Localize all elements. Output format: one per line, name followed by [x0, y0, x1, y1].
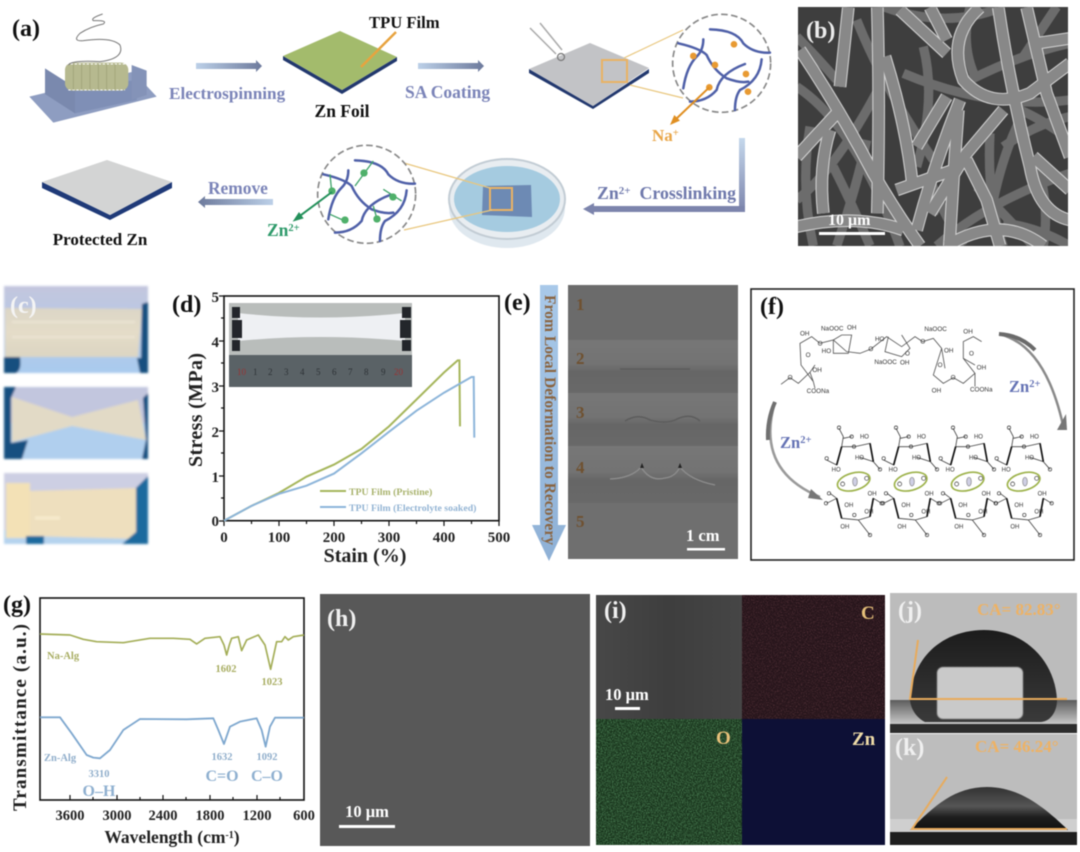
molecule: zinc alginate unit 4: OH [1014, 503, 1023, 509]
bond labels: C=O [205, 768, 239, 785]
inset photo of tensile specimen: 5 [316, 367, 321, 377]
background [890, 734, 1077, 845]
icon: Zn-alginate network circle [293, 145, 416, 243]
panel a: fabrication schematic [12, 13, 771, 249]
molecule: zinc alginate unit 3: OH [958, 503, 967, 509]
element C: C [861, 603, 875, 624]
ticks [219, 296, 499, 526]
molecule: sodium alginate: OH [900, 359, 910, 366]
substrate [890, 700, 1077, 733]
molecule: sodium alginate: O [951, 375, 956, 382]
label h: (h) [327, 606, 356, 632]
text: SA Coating: SA Coating [405, 82, 490, 102]
scale label: 10 μm [605, 685, 649, 704]
legend: TPU Film (Electrolyte soaked) [349, 503, 476, 514]
molecule: zinc alginate unit 1: OH [844, 503, 853, 509]
molecule: sodium alginate: OH [847, 325, 857, 332]
molecule: zinc alginate unit 4: OH [1010, 525, 1019, 531]
legend: TPU Film (Pristine) [349, 487, 432, 498]
scale bar [819, 232, 885, 235]
step numbers: 5 [576, 512, 584, 531]
scale bar [339, 825, 395, 828]
y tick labels: 0 [212, 514, 219, 530]
x axis title: ) [234, 827, 240, 847]
text: Zn2+ left: 2+ [800, 435, 811, 446]
icon: protected Zn plate [42, 160, 172, 220]
fibres [797, 7, 1070, 247]
text: Zn Foil: Zn Foil [315, 101, 370, 121]
molecule: zinc alginate unit 1: HO [855, 455, 864, 461]
map: C [742, 595, 885, 719]
molecule: zinc alginate unit 2: OH [925, 491, 934, 497]
arrow: to zinc foil [196, 60, 262, 72]
inset photo of tensile specimen: 2 [268, 367, 272, 377]
scale bar [615, 707, 640, 710]
label e: (e) [504, 290, 531, 316]
y axis title: Transmittance (a.u.) [10, 624, 31, 811]
molecule: zinc alginate unit 2: HO [917, 435, 926, 441]
x tick labels: 3000 [102, 808, 132, 824]
inset photo of tensile specimen: 4 [300, 367, 305, 377]
icon: petri dish [404, 159, 565, 248]
x tick labels [56, 808, 315, 824]
substrate [890, 819, 1077, 845]
text: Remove: Remove [208, 178, 268, 198]
SEM background [798, 7, 1068, 246]
x axis title: Stain (%) [324, 545, 406, 567]
text: TPU Film: TPU Film [369, 13, 440, 32]
label i: (i) [604, 598, 627, 624]
y tick labels: 2 [212, 425, 219, 441]
background [890, 593, 1077, 733]
droplet [910, 787, 1068, 830]
spectrum: Zn-Alg [40, 717, 304, 758]
icon: coated plate with pipette [529, 23, 683, 109]
molecule: sodium alginate: OH [963, 329, 973, 336]
peak labels Zn-Alg [44, 752, 278, 780]
molecule: zinc alginate unit 1: HO [832, 467, 841, 473]
arrow: top curved [999, 334, 1067, 430]
element Zn: Zn [852, 729, 876, 750]
y tick labels [212, 290, 220, 530]
inset photo of tensile specimen: 8 [364, 367, 369, 377]
molecule: sodium alginate: OH [812, 367, 822, 374]
photo strip [568, 285, 738, 559]
inset photo of tensile specimen: 9 [381, 367, 386, 377]
map: SEM [596, 595, 742, 719]
axes frame [40, 598, 304, 800]
x tick labels: 3600 [56, 808, 84, 824]
photo: rolled [4, 473, 148, 544]
panel e: scratch recovery [504, 285, 738, 561]
x tick labels: 0 [220, 530, 228, 546]
molecule: sodium alginate: OH [800, 331, 810, 338]
molecule: zinc alginate unit 1: OH [868, 491, 877, 497]
molecule: sodium alginate: NaOOC [821, 325, 844, 332]
leader: TPU film [361, 32, 396, 67]
x tick labels: 300 [378, 530, 400, 546]
molecule: sodium alginate: OH [932, 387, 942, 394]
label f: (f) [760, 294, 784, 320]
molecule: zinc alginate unit 3: OH [954, 525, 963, 531]
molecule: zinc alginate unit 1: HO [860, 435, 869, 441]
molecule: sodium alginate: NaOOC [874, 359, 897, 366]
step numbers [576, 295, 585, 531]
x tick labels: 600 [293, 808, 315, 824]
peak labels Zn-Alg: 1092 [256, 752, 278, 763]
x tick labels: 500 [488, 530, 510, 546]
arrow: crosslinking L-shaped [583, 138, 745, 215]
legend [320, 487, 476, 514]
x axis title: -1 [225, 830, 234, 841]
peak labels Zn-Alg: 3310 [88, 769, 110, 780]
label j: (j) [898, 598, 922, 624]
inset photo of tensile specimen: 1 [253, 367, 258, 377]
panel c: stretched film photos [4, 286, 148, 544]
inset photo of tensile specimen: 10 [237, 367, 246, 377]
panel d: stress-strain chart [172, 290, 510, 567]
molecule: sodium alginate: HO [822, 348, 831, 355]
label g: (g) [3, 592, 31, 618]
icon: green TPU film on Zn foil [283, 31, 397, 94]
x tick labels: 200 [323, 530, 345, 546]
SEM background [320, 594, 590, 846]
inset photo of tensile specimen: 7 [348, 367, 353, 377]
icon: electrospinning device [29, 14, 157, 123]
y tick labels: 3 [212, 380, 219, 396]
peak labels Na-Alg: 1602 [216, 664, 236, 675]
curve: electrolyte soaked [224, 377, 474, 521]
map: Zn [742, 719, 885, 845]
text: Na+: Na [652, 126, 673, 145]
arrow caption: From Local Deformation to Recovery [541, 295, 558, 545]
text: Zn2+ left: Zn [780, 433, 800, 452]
peak labels Na-Alg: 1023 [262, 677, 282, 688]
photo: twisted [4, 387, 148, 459]
text: Zn2+ Crosslinking: 2+ [619, 185, 631, 197]
molecule: zinc alginate unit 4 [994, 426, 1053, 537]
molecule: sodium alginate: HO [875, 336, 885, 343]
molecule: zinc alginate unit 4: OH [1038, 491, 1047, 497]
label a: (a) [12, 16, 40, 42]
molecule: sodium alginate: O [818, 341, 823, 348]
scale label: 1 cm [686, 526, 720, 545]
label b: (b) [806, 18, 835, 44]
molecule: zinc alginate unit 3 [938, 426, 997, 537]
bond labels: O–H [83, 783, 116, 800]
step numbers: 3 [576, 403, 584, 422]
icon: Na-alginate network circle [670, 14, 771, 125]
inset photo of tensile specimen: 6 [332, 367, 337, 377]
bond labels: C–O [251, 768, 283, 785]
molecule: sodium alginate: O [905, 350, 910, 357]
x tick labels: 2400 [148, 808, 178, 824]
x tick labels: 400 [433, 530, 455, 546]
molecule: sodium alginate: O [969, 351, 974, 358]
peak labels Na-Alg: Na-Alg [47, 651, 80, 662]
molecule: zinc alginate unit 4: HO [1030, 435, 1039, 441]
scale label: 10 μm [345, 802, 389, 821]
spectrum: Na-Alg [40, 634, 304, 669]
peak labels Zn-Alg: Zn-Alg [44, 753, 77, 764]
panel i: EDS maps [596, 595, 885, 845]
molecule: zinc alginate unit 3: HO [946, 467, 955, 473]
molecule: zinc alginate unit 2: OH [921, 510, 930, 516]
scale bar [687, 548, 725, 550]
molecule: zinc alginate unit 3: HO [974, 435, 983, 441]
step numbers: 1 [576, 295, 584, 314]
molecule: zinc alginate unit 2: HO [912, 455, 921, 461]
molecule: zinc alginate unit 2: OH [897, 525, 906, 531]
molecule: sodium alginate: O [868, 346, 873, 353]
molecule: zinc alginate unit 3: HO [969, 455, 978, 461]
frame [751, 289, 1074, 560]
peak labels Zn-Alg: 1632 [212, 752, 232, 763]
text: Zn2+ released: Zn [267, 220, 288, 240]
text: Na+: + [673, 128, 679, 139]
text: electrospinning: Electrospinning [169, 84, 286, 103]
text: Protected Zn: Protected Zn [53, 230, 148, 249]
inset photo of tensile specimen: 3 [284, 367, 289, 377]
panel k: contact angle 46.24 [890, 734, 1077, 845]
map: O [596, 719, 742, 845]
x axis title: Wavelength (cm [104, 827, 225, 847]
molecule: zinc alginate unit 4: HO [1025, 455, 1034, 461]
molecule: zinc alginate unit 2: HO [889, 467, 898, 473]
text: Zn2+ top: Zn [1009, 377, 1029, 396]
axes frame [224, 296, 499, 521]
droplet [910, 630, 1057, 722]
bond labels [83, 768, 283, 800]
molecule: zinc alginate unit 1: OH [840, 525, 849, 531]
y tick labels: 4 [212, 335, 220, 351]
ticks [70, 795, 280, 800]
arrow: bottom curved [768, 402, 823, 500]
x tick labels: 100 [268, 530, 290, 546]
y tick labels: 5 [212, 290, 219, 306]
photo: stretched [4, 286, 148, 373]
label d: (d) [172, 292, 201, 318]
molecule: sodium alginate: O [938, 362, 943, 369]
label k: (k) [895, 735, 924, 761]
text: Zn2+ top: 2+ [1029, 379, 1040, 390]
inset photo of tensile specimen: 20 [394, 367, 404, 377]
text: Zn2+ Crosslinking: Crosslinking [640, 183, 736, 203]
element O: O [716, 728, 731, 749]
molecule: zinc alginate unit 2 [881, 426, 940, 537]
panel g: FTIR chart [3, 592, 315, 847]
panel b: SEM image of fibres [797, 7, 1070, 247]
molecule: zinc alginate unit 1: OH [864, 510, 873, 516]
molecule: zinc alginate unit 3: OH [982, 491, 991, 497]
panel h: SEM flat surface [320, 594, 590, 846]
x tick labels [220, 530, 510, 546]
panel f: alginate crosslinking scheme [751, 289, 1074, 560]
molecule: zinc alginate unit 1 [824, 426, 883, 537]
angle text: CA= 46.24° [975, 737, 1059, 756]
x tick labels: 1800 [196, 808, 224, 824]
molecule: sodium alginate: OH [977, 365, 987, 372]
angle lines [912, 777, 1067, 829]
molecule: sodium alginate: NaOOC [924, 326, 947, 333]
step numbers: 2 [576, 349, 584, 368]
inset photo of tensile specimen [229, 303, 412, 387]
arrow: to SA coating [418, 60, 484, 72]
molecule: zinc alginate unit 2: OH [901, 503, 910, 509]
curve: pristine [224, 360, 460, 521]
peak labels Na-Alg [47, 651, 282, 688]
molecule: sodium alginate: O [920, 339, 925, 346]
molecule: sodium alginate: COONa [807, 388, 830, 395]
y axis title: Stress (MPa) [185, 353, 207, 467]
molecule: sodium alginate: COONa [970, 387, 993, 394]
molecule: zinc alginate unit 4: OH [1034, 510, 1043, 516]
molecule: sodium alginate [781, 325, 993, 395]
label c: (c) [10, 293, 37, 319]
text: Zn2+ released: 2+ [288, 223, 300, 234]
angle text: CA= 82.83° [977, 600, 1061, 619]
arrow: recovery sequence [532, 285, 566, 561]
scale label: 10 μm [828, 212, 871, 229]
molecule: zinc alginate unit 3: OH [978, 510, 987, 516]
y tick labels: 1 [212, 470, 219, 486]
panel j: contact angle 82.83 [890, 593, 1077, 733]
molecule: sodium alginate: OH [944, 348, 954, 355]
angle lines [910, 640, 1067, 699]
molecule: sodium alginate: O [806, 352, 811, 359]
x tick labels: 1200 [242, 808, 272, 824]
text: Zn2+ Crosslinking: Zn [597, 183, 619, 203]
molecule: sodium alginate: O [788, 375, 793, 382]
arrow: remove [198, 196, 273, 208]
molecule: zinc alginate unit 4: HO [1002, 467, 1011, 473]
step numbers: 4 [576, 458, 585, 477]
